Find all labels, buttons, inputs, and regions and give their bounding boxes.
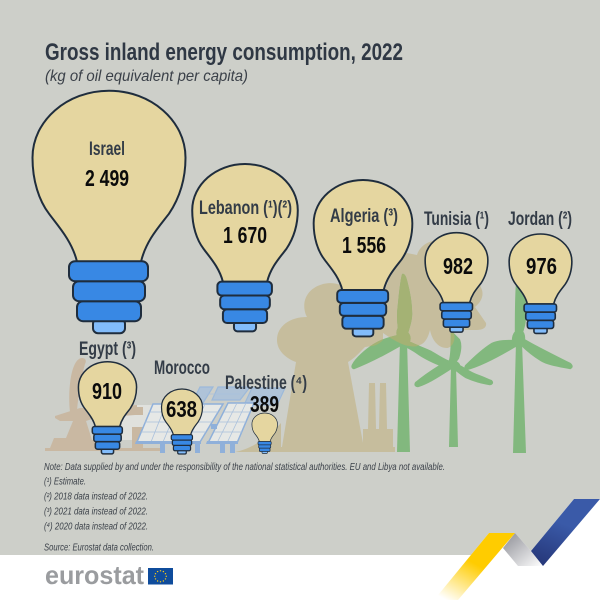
footnotes <box>44 462 445 554</box>
bulb: Algeria <box>314 180 412 336</box>
bulb: Algeria: 1 556 <box>342 232 386 258</box>
bulb: Tunisia <box>424 209 489 332</box>
bulb: Israel <box>32 91 186 333</box>
decorative ribbon <box>434 499 600 600</box>
bulb: Egypt: Egypt (³) <box>79 339 136 360</box>
title: Gross inland energy consumption, 2022 <box>45 39 403 66</box>
bulb: Tunisia: 982 <box>443 253 473 279</box>
bulb: Morocco: 638 <box>166 396 197 422</box>
bulb: Israel: 2 499 <box>85 165 129 191</box>
bulb: Jordan: 976 <box>526 253 557 279</box>
bulb: Egypt: 910 <box>92 378 122 404</box>
bulb: Morocco <box>154 358 210 454</box>
footnotes: Note: Data supplied by and under the responsibility of the national statistical authorities. EU and Libya not available. <box>44 462 445 473</box>
bulb: Algeria: Algeria (³) <box>330 206 398 227</box>
illustration: light backdrop behind pump <box>122 405 160 440</box>
bulb: Tunisia: Tunisia (¹) <box>424 209 489 230</box>
bulb: Lebanon: 1 670 <box>223 222 267 248</box>
eurostat logo: eurostat <box>45 560 144 590</box>
bulb: Palestine <box>225 373 307 453</box>
illustration: wind turbines <box>353 275 572 453</box>
illustration: cooling tower and smoke <box>235 240 486 452</box>
bulb: Palestine: Palestine (⁴) <box>225 373 307 394</box>
subtitle: (kg of oil equivalent per capita) <box>45 68 248 85</box>
bulb: Lebanon: Lebanon (¹)(²) <box>199 198 292 219</box>
illustration: oil pump jack <box>45 358 163 451</box>
footnotes: Source: Eurostat data collection. <box>44 543 154 554</box>
footnotes: (¹) Estimate. <box>44 476 86 488</box>
bulb: Palestine: 389 <box>250 391 279 417</box>
footnotes: (²) 2018 data instead of 2022. <box>44 492 148 502</box>
bulb: Jordan <box>508 209 572 333</box>
bulb: Morocco: Morocco <box>154 358 210 379</box>
bulb: Israel: Israel <box>89 139 125 160</box>
bulb: Lebanon <box>192 164 298 331</box>
bulb: Jordan: Jordan (²) <box>508 209 572 230</box>
footnotes: (⁴) 2020 data instead of 2022. <box>44 522 148 533</box>
illustration: solar panels <box>135 387 285 453</box>
bulb: Egypt <box>78 339 137 454</box>
footnotes: (³) 2021 data instead of 2022. <box>44 507 148 518</box>
